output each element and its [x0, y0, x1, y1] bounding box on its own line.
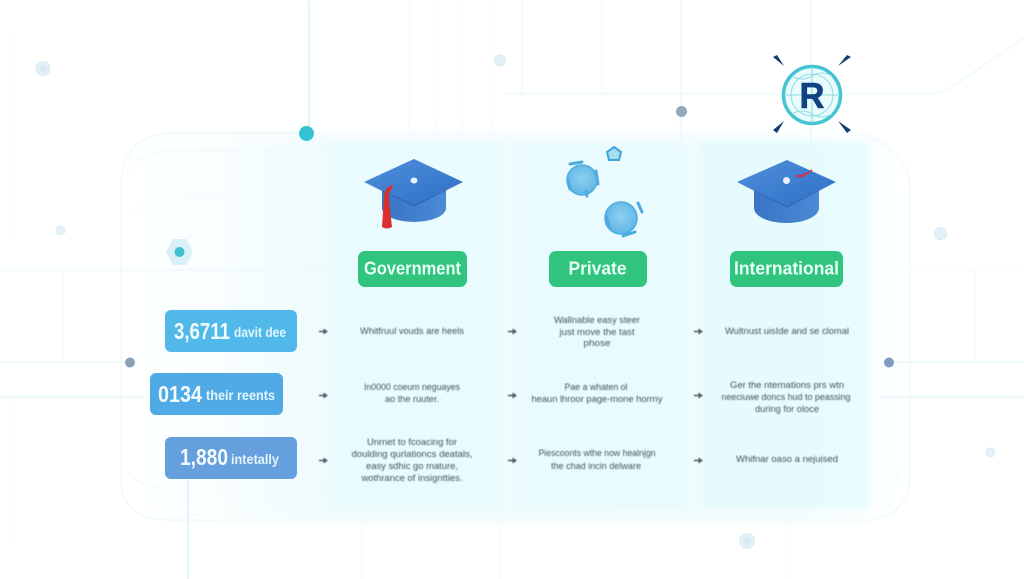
stat box: 0134: 0134 — [158, 381, 202, 407]
text: international row 3: Whifnar oaso a nejuised — [736, 454, 838, 464]
text: private row 3: the chad incin delware — [551, 461, 641, 471]
text: government row 3: wothrance of insigntties. — [360, 473, 462, 483]
text: government row 1: Whitfruul vouds are heels — [360, 326, 464, 336]
row arrows — [319, 328, 703, 464]
rounded main panel — [121, 134, 910, 520]
badge: Government — [358, 251, 467, 287]
badge: International: International — [734, 258, 839, 278]
text: private row 2: Pae a whaten ol — [564, 382, 628, 392]
node: grey dot upper — [676, 106, 687, 117]
text: private row 1: just move the tast — [558, 327, 635, 337]
text: private row 2: heaun lhroor page-mone horrny — [532, 394, 663, 404]
text: government row 2: In0000 coeum neguayes — [364, 382, 460, 392]
text: private row 3 — [538, 448, 656, 471]
text: private row 1: Wallnable easy steer — [554, 315, 640, 325]
stat box: 0134 — [150, 373, 283, 415]
icon: R globe logo — [773, 55, 851, 133]
text: international row 2: Ger the nternations prs wtn — [730, 380, 844, 390]
stat box: 1,880: intetally — [231, 451, 279, 467]
stat box: 3,6711 — [165, 310, 297, 352]
icon: graduation cap government — [364, 159, 463, 228]
stat box: 1,880 — [165, 437, 297, 479]
node: blue dot right — [884, 358, 894, 368]
text: international row 2 — [722, 380, 850, 414]
text: international row 2: neeciuwe doncs hud to peassing — [722, 392, 850, 402]
text: private row 1: phose — [584, 338, 610, 348]
text: private row 2 — [532, 382, 663, 404]
badge: International — [730, 251, 843, 287]
stat box: 3,6711: 3,6711 — [174, 318, 230, 344]
stat box: 0134: their reents — [206, 387, 275, 403]
badge: Private — [549, 251, 647, 287]
icon: molecules private — [567, 147, 642, 236]
badge: Private: Private — [568, 258, 626, 278]
text: international row 1: Wultnust uisIde and se clomal — [725, 326, 849, 336]
column panels — [330, 142, 869, 508]
text: government row 3: doulding qurlationcs deatals, — [352, 449, 472, 459]
text: government row 3 — [352, 437, 472, 483]
text: government row 2: ao the ruuter. — [385, 394, 439, 404]
text: international row 2: during for oloce — [755, 404, 819, 414]
text: government row 3: Unrnet to fcoacing for — [367, 437, 457, 447]
badge: Government: Government — [364, 258, 461, 278]
decorative nodes — [36, 55, 995, 548]
node: teal corner dot — [299, 126, 314, 141]
stat box: 1,880: 1,880 — [180, 444, 228, 470]
text: private row 3: Piescoonts wthe now healnjgn — [538, 448, 656, 458]
text: government row 2 — [364, 382, 460, 404]
node: grey dot left — [125, 358, 135, 368]
text: government row 3: easy sdhic go mature, — [366, 461, 458, 471]
icon: graduation cap international — [737, 160, 836, 223]
node: teal hexagon — [166, 239, 193, 265]
stat box: 3,6711: davit dee — [234, 324, 286, 340]
text: private row 1 — [554, 315, 640, 348]
icon: R globe logo: R — [800, 75, 824, 116]
